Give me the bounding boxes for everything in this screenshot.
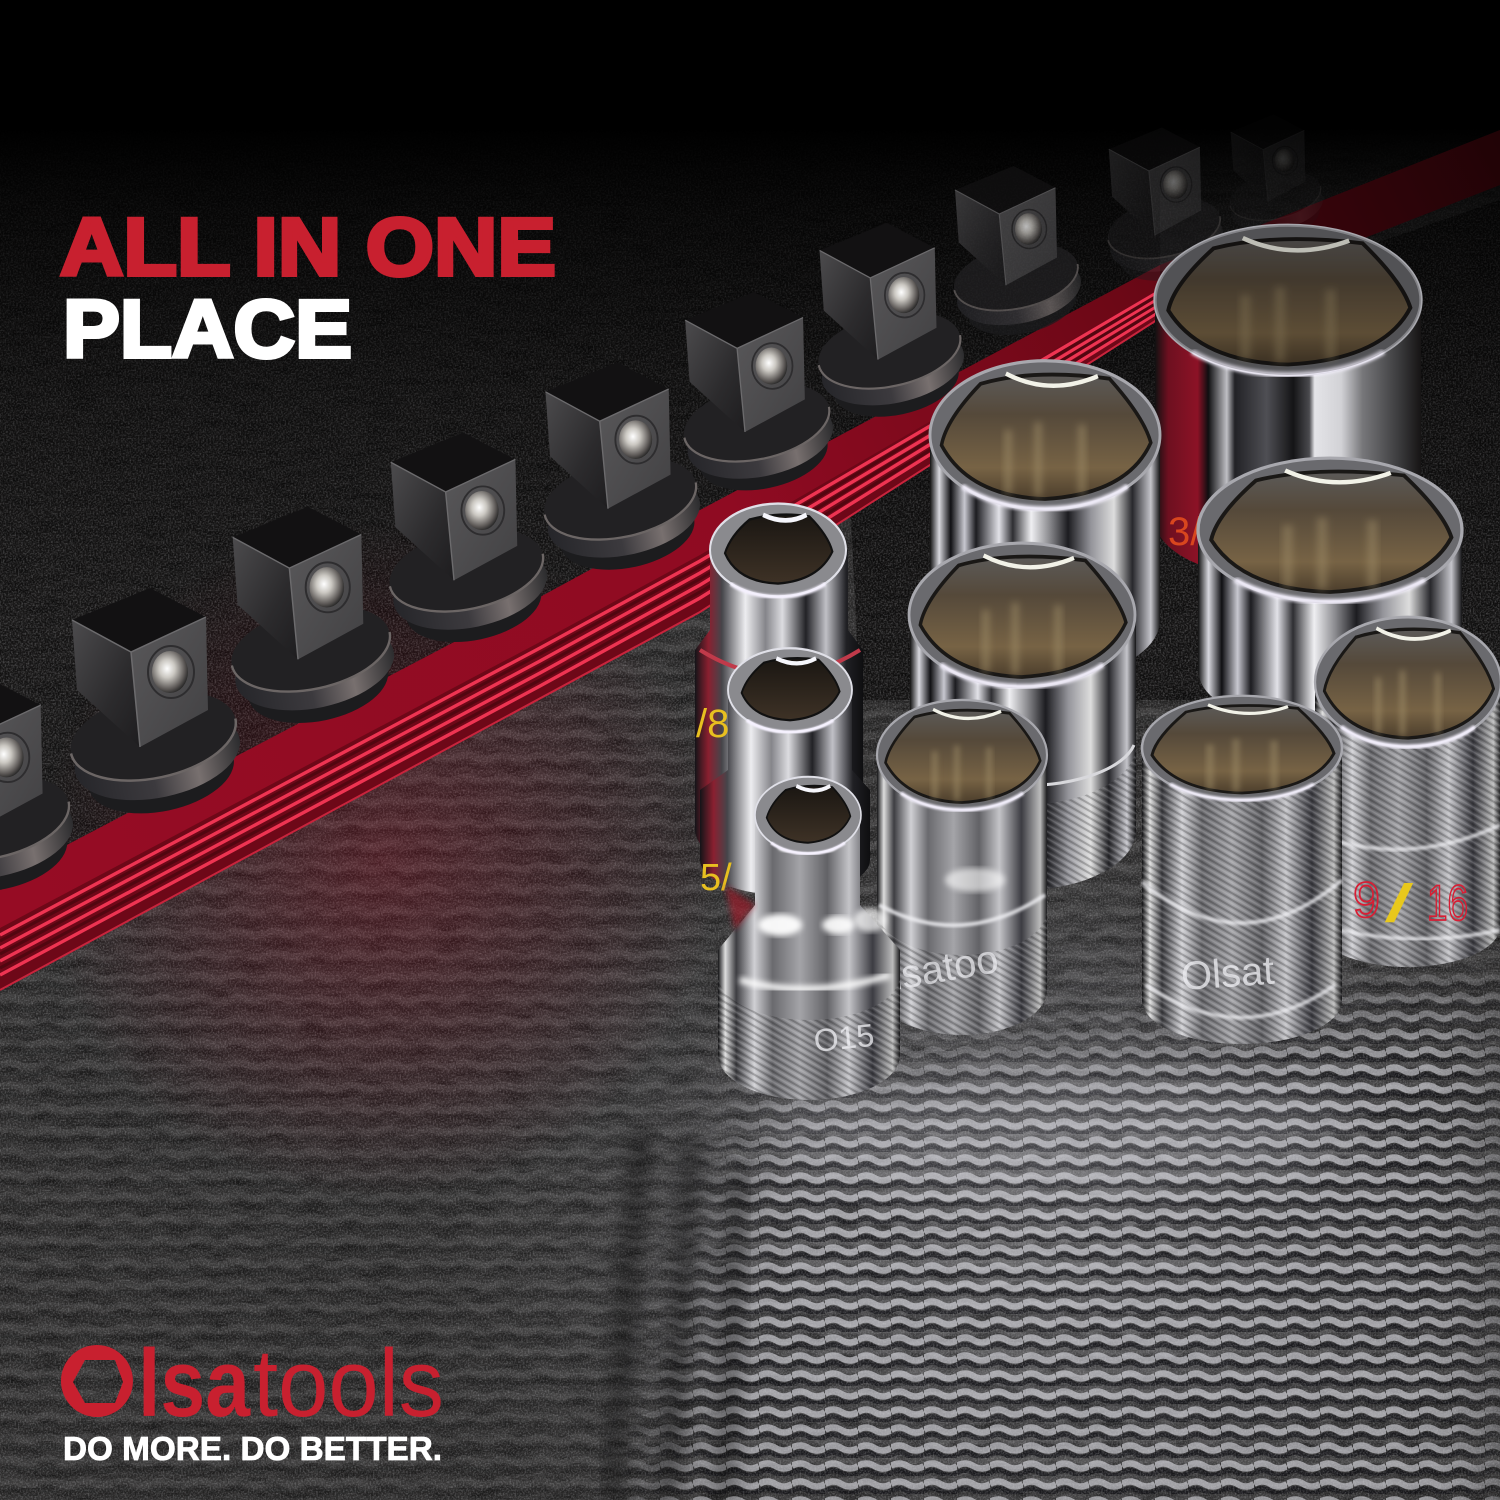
adapter 1 — [62, 588, 251, 828]
adapter 8 — [1102, 127, 1231, 290]
socket: smallest front — [718, 777, 900, 1100]
icon: hexagon socket O — [61, 1345, 133, 1417]
socket: front centre — [877, 700, 1047, 1035]
size marking: 5/ — [700, 857, 732, 899]
adapter 2 — [223, 507, 405, 737]
engraved brand: O15 — [812, 1017, 876, 1059]
light reflection on mat below sockets — [760, 1070, 1360, 1190]
socket: centre — [909, 543, 1136, 890]
socket: small back — [695, 504, 863, 870]
sockets group — [695, 225, 1500, 1100]
adapter 5 — [677, 292, 843, 503]
engraved brand: Olsat — [1180, 949, 1276, 999]
adapter 0 — [0, 678, 84, 905]
socket: back centre — [930, 361, 1160, 680]
size marking 9/16 — [1353, 872, 1468, 933]
socket: right large — [1198, 458, 1462, 730]
wordmark bold: lsa — [138, 1330, 251, 1437]
wordmark light: tools — [253, 1330, 444, 1437]
socket: back large — [1155, 225, 1421, 580]
socket: front right — [1142, 696, 1342, 1044]
size marking 9/16: 16 — [1427, 875, 1468, 931]
heading line 1: ALL IN ONE — [60, 202, 556, 293]
heading line 2: PLACE — [63, 284, 352, 375]
heading — [60, 202, 556, 375]
adapter 4 — [537, 362, 710, 583]
logo — [61, 1330, 444, 1467]
adapter 6 — [811, 223, 974, 429]
size marking 9/16: 9 — [1353, 872, 1380, 928]
adapters on the rail — [0, 114, 1329, 905]
engraved brand: lsatoo — [889, 937, 1002, 999]
adapter 3 — [382, 432, 557, 655]
size marking: /8 — [696, 702, 729, 746]
far shadow area behind rail and sockets — [0, 0, 1500, 990]
tagline: DO MORE. DO BETTER. — [63, 1430, 442, 1467]
adapter 7 — [948, 166, 1089, 346]
size marking: 3/ — [1168, 510, 1202, 554]
socket: small middle — [700, 648, 870, 899]
size marking 9/16: / — [1386, 875, 1413, 933]
adapter 9 — [1225, 114, 1329, 246]
shadow stripes on mat — [612, 1130, 738, 1500]
socket: far right 9/16 — [1315, 617, 1500, 967]
red aluminium rail — [0, 130, 1500, 990]
